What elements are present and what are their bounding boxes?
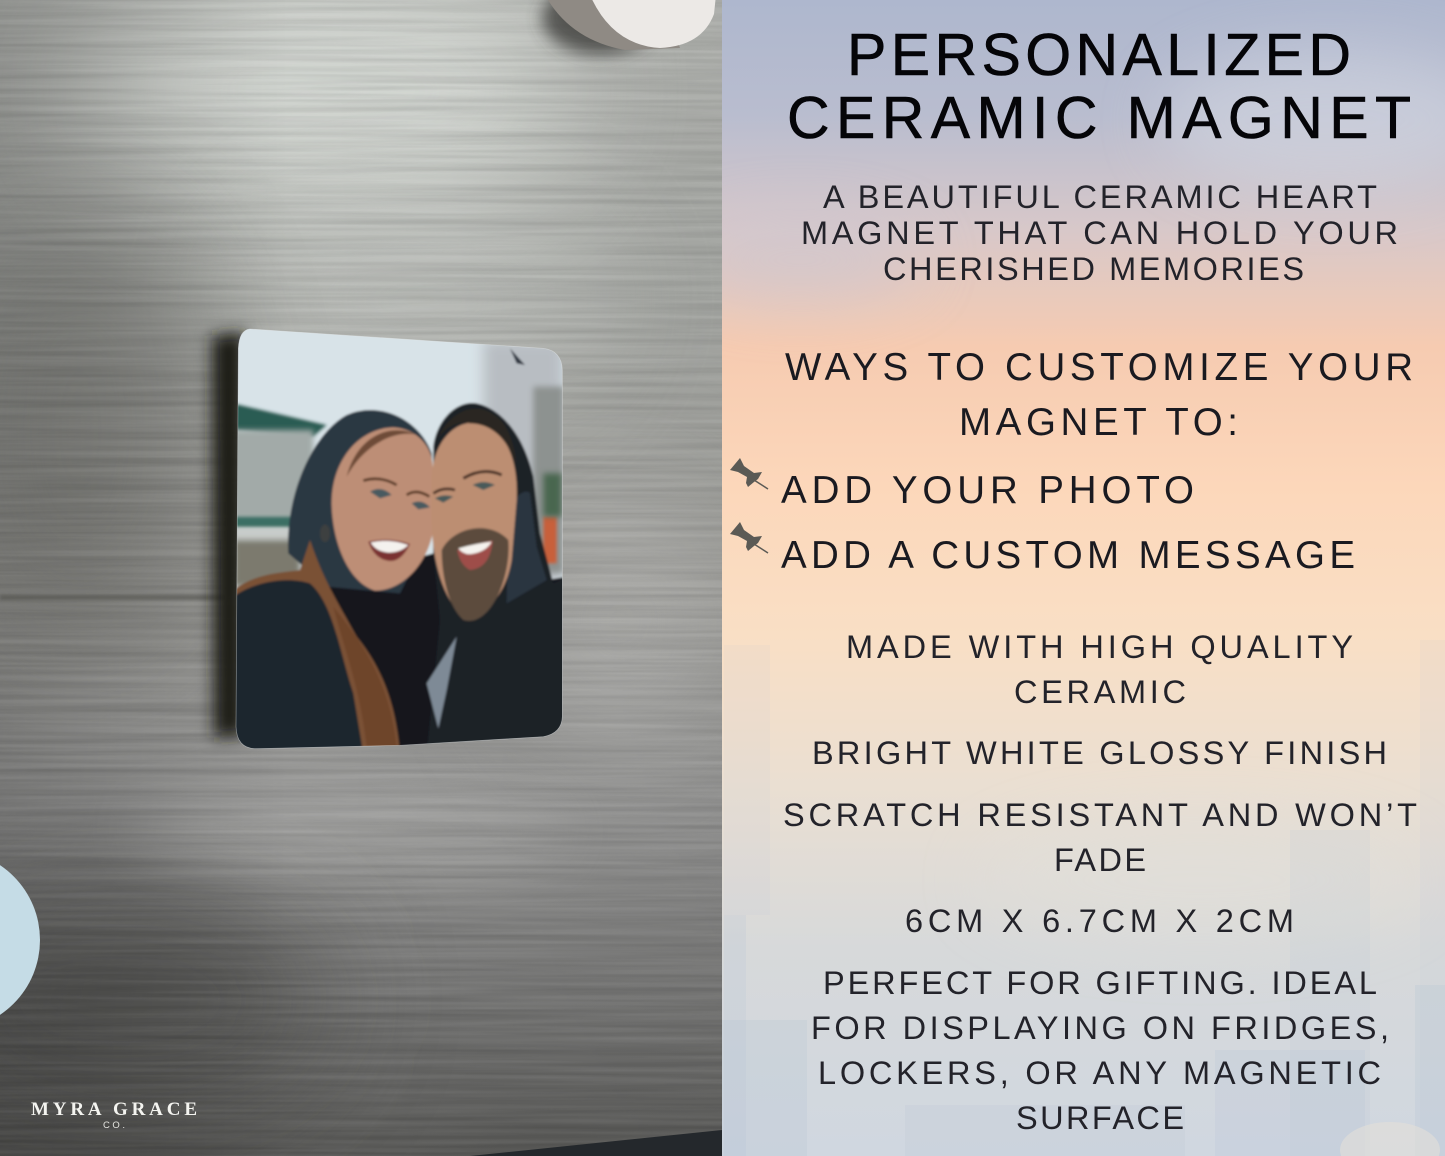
photo background bbox=[236, 329, 562, 590]
list item: add a custom message: ADD A CUSTOM MESSAGE bbox=[781, 534, 1355, 577]
logo: Myra Grace Co. bbox=[31, 1102, 196, 1128]
feature: high quality ceramic bbox=[848, 635, 1352, 704]
dark base of jackets bbox=[328, 552, 562, 746]
feature: perfect for gifting bbox=[811, 965, 1389, 1136]
feature: scratch resistant: SCRATCH RESISTANT AND WON’T bbox=[783, 797, 1417, 833]
panel: left fridge photo bbox=[0, 0, 730, 1156]
heading: product title bbox=[790, 33, 1410, 139]
text block: product description: CHERISHED MEMORIES bbox=[883, 251, 1304, 287]
magnet shadow bbox=[212, 332, 245, 738]
heading: ways to customize: MAGNET TO: bbox=[959, 401, 1238, 444]
feature: perfect for gifting: FOR DISPLAYING ON FRIDGES, bbox=[811, 1010, 1389, 1046]
icon: push pin 1 bbox=[730, 458, 768, 489]
heading: ways to customize: WAYS TO CUSTOMIZE YOUR bbox=[785, 346, 1413, 389]
feature: dimensions: 6CM X 6.7CM X 2CM bbox=[905, 903, 1294, 939]
text block: product description: MAGNET THAT CAN HOLD YOUR bbox=[801, 215, 1398, 251]
pale blue round magnet left bbox=[0, 865, 40, 1015]
brushed metal fridge door bbox=[0, 0, 730, 1156]
feature: perfect for gifting: LOCKERS, OR ANY MAGNETIC bbox=[818, 1055, 1381, 1091]
logo: Myra Grace Co.: CO. bbox=[103, 1120, 125, 1131]
sky gradient bbox=[722, 0, 1445, 1156]
heading: ways to customize bbox=[785, 352, 1412, 436]
ceramic magnet with couple photo bbox=[230, 323, 570, 757]
faint city skyline bbox=[722, 985, 1445, 1156]
panel: right sunset sky background bbox=[680, 0, 1445, 1156]
soft clouds bbox=[728, 47, 1445, 299]
logo: Myra Grace Co.: MYRA GRACE bbox=[31, 1099, 197, 1120]
feature: perfect for gifting: SURFACE bbox=[1016, 1100, 1184, 1136]
feature: glossy finish: BRIGHT WHITE GLOSSY FINISH bbox=[812, 735, 1387, 771]
list item: add your photo: ADD YOUR PHOTO bbox=[781, 469, 1194, 512]
feature: perfect for gifting: PERFECT FOR GIFTING. IDEAL bbox=[823, 965, 1377, 1001]
bottom edge of fridge door bbox=[470, 1130, 722, 1156]
white round magnet top bbox=[542, 0, 716, 54]
feature: scratch resistant bbox=[784, 803, 1416, 871]
woman bbox=[233, 410, 433, 753]
feature: scratch resistant: FADE bbox=[1054, 842, 1146, 878]
icon: push pin 2 bbox=[730, 522, 768, 553]
text block: product description bbox=[804, 185, 1396, 280]
text block: product description: A BEAUTIFUL CERAMIC HEART bbox=[823, 179, 1377, 215]
man bbox=[427, 403, 567, 753]
heading: product title: PERSONALIZED bbox=[847, 22, 1351, 88]
feature: high quality ceramic: MADE WITH HIGH QUALITY bbox=[846, 629, 1353, 665]
heading: product title: CERAMIC MAGNET bbox=[787, 85, 1411, 151]
feature: high quality ceramic: CERAMIC bbox=[1014, 674, 1186, 710]
